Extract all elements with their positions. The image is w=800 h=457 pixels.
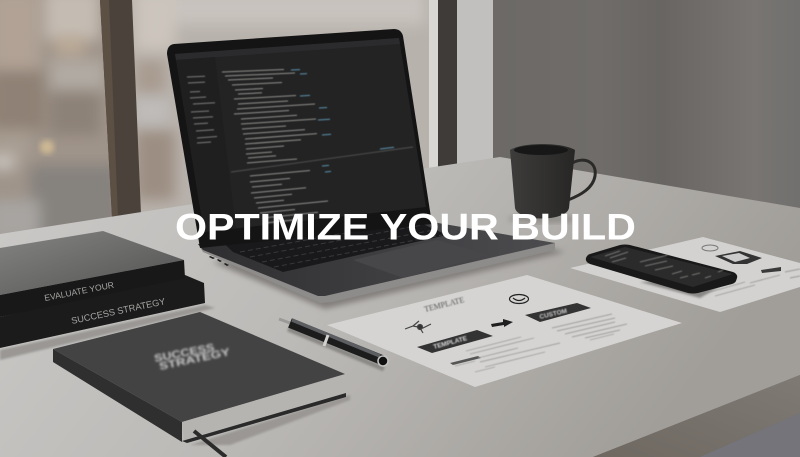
icon: monitor [715,251,762,264]
ribbon bookmark [194,431,226,457]
small pill label [450,356,481,365]
smartphone [586,244,737,298]
label bar: template: TEMPLATE [433,335,469,351]
notebook cover title: SUCCESS [153,342,215,365]
book spine label: success strategy: SUCCESS STRATEGY [70,296,166,326]
laptop base and keyboard [198,215,555,303]
back book stack [0,231,215,360]
icon: circular smile badge [510,294,528,304]
paper heading: template: TEMPLATE [423,295,465,314]
paper: template vs custom [327,275,682,387]
icon: small circle [702,245,718,251]
label bar: template [417,330,493,353]
label bar: custom [525,303,591,322]
upper book [0,231,184,295]
label bar: custom: CUSTOM [539,308,568,321]
book spine label: evaluate your: EVALUATE YOUR [43,280,115,303]
pen [279,319,388,369]
coffee mug [508,144,595,223]
paper body text lines [455,314,627,372]
laptop screen [167,29,432,248]
title: OPTIMIZE YOUR BUILD [175,206,636,248]
paper: second sheet [570,237,800,312]
small badge [761,267,781,273]
notebook cover title: STRATEGY [158,346,231,373]
sheet text lines [700,269,800,296]
notebook cover title [153,342,231,373]
lower book [0,275,205,348]
notebook [53,312,350,457]
icon: template nodes [405,321,431,333]
desk surface [0,157,800,457]
code editor lines [187,70,413,223]
arrow: template to custom [491,319,513,327]
laptop [167,29,565,309]
